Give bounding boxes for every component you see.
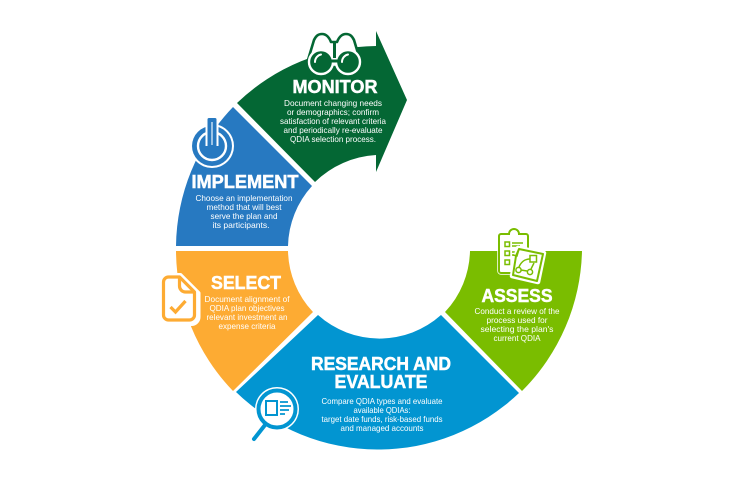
text: research description: Compare QDIA types and evaluate <box>322 397 443 406</box>
heading: monitor: MONITOR <box>292 77 378 97</box>
text: assess description: selecting the plan's <box>480 325 554 334</box>
text: implement description <box>196 194 293 230</box>
text: assess description: Conduct a review of the <box>474 307 560 316</box>
text: select description: expense criteria <box>218 322 276 331</box>
text: implement description: its participants. <box>212 221 270 230</box>
icon: binoculars <box>308 34 360 75</box>
segment: select <box>162 251 313 391</box>
text: research description: target date funds, risk-based funds <box>322 415 442 424</box>
icon: magnifying glass <box>254 387 299 439</box>
heading: assess: ASSESS <box>482 286 552 306</box>
text: select description <box>204 295 290 331</box>
text: assess description: current QDIA <box>494 334 541 343</box>
text: select description: relevant investment an <box>206 313 288 322</box>
text: research description: and managed accounts <box>340 424 424 433</box>
text: monitor description <box>280 99 386 144</box>
heading: select: SELECT <box>211 273 281 293</box>
heading: research and evaluate: RESEARCH AND <box>311 354 451 374</box>
icon: assess clipboard and flowchart <box>499 229 544 282</box>
text: monitor description: Document changing needs <box>284 99 382 108</box>
text: research description <box>322 397 443 433</box>
text: monitor description: and periodically re-evaluate <box>284 126 383 135</box>
heading: research and evaluate <box>311 354 451 392</box>
text: assess description: process used for <box>486 316 548 325</box>
text: research description: available QDIAs: <box>354 406 410 415</box>
segment: research and evaluate <box>236 315 519 450</box>
icon: document with check <box>162 275 198 324</box>
text: implement description: serve the plan and <box>210 212 278 221</box>
segment: implement <box>176 107 312 246</box>
icon: power button <box>190 116 234 168</box>
text: monitor description: satisfaction of relevant criteria <box>280 117 386 126</box>
segment: assess <box>445 229 582 391</box>
segment: monitor arrow <box>237 31 407 182</box>
text: assess description <box>474 307 560 343</box>
text: implement description: method that will best <box>206 203 282 212</box>
text: select description: Document alignment of <box>204 295 290 304</box>
text: monitor description: QDIA selection process. <box>290 135 376 144</box>
heading: implement: IMPLEMENT <box>192 172 299 192</box>
text: implement description: Choose an implementation <box>196 194 293 203</box>
text: select description: QDIA plan objectives <box>210 304 284 313</box>
text: monitor description: or demographics; confirm <box>287 108 379 117</box>
heading: research and evaluate: EVALUATE <box>334 372 428 392</box>
